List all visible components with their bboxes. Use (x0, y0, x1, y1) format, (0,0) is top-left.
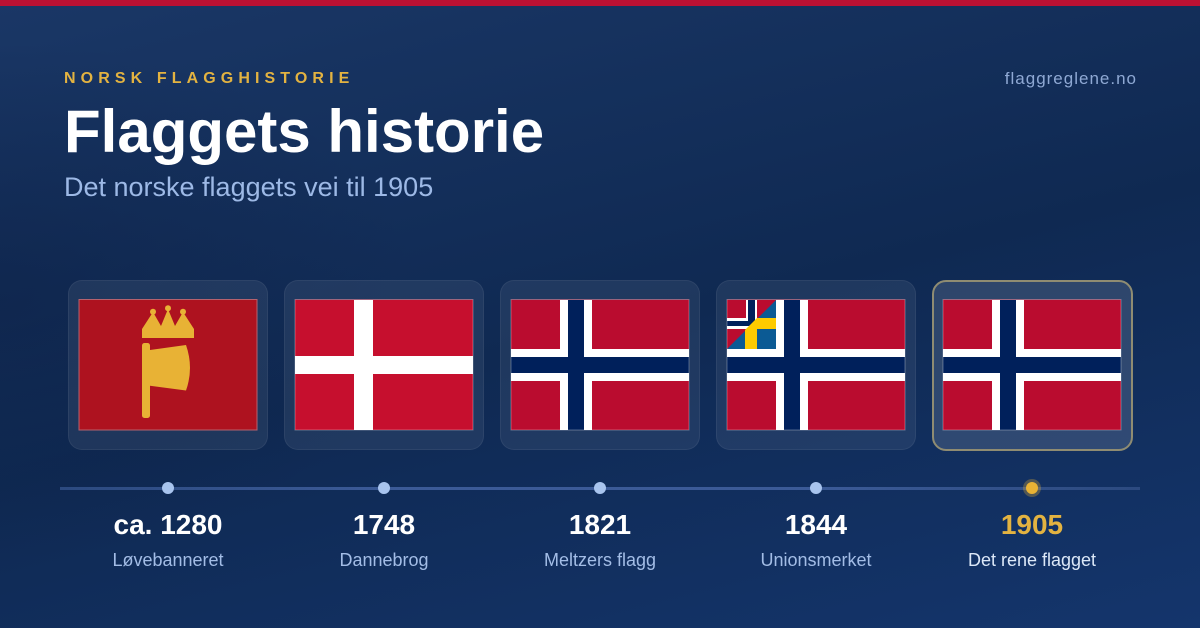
flag: Dannebrog (294, 299, 474, 430)
flag: Det rene flagget (942, 299, 1122, 430)
icon: lion axe (142, 343, 190, 418)
timeline dot: 1905 (highlighted) (1026, 482, 1038, 494)
flag: Meltzers flagg (510, 299, 690, 430)
timeline dot: 1821 (594, 482, 606, 494)
year: 1821: 1821 (569, 509, 631, 540)
title: Flaggets historie (64, 98, 544, 165)
timeline dot: ca. 1280 (162, 482, 174, 494)
label: Løvebanneret: Løvebanneret (112, 550, 224, 570)
panel: Meltzers flagg card (500, 280, 700, 450)
panel: Unionsmerket flag card (716, 280, 916, 450)
icon: union mark (727, 300, 776, 349)
panel: Løvebanneret flag card (68, 280, 268, 450)
label: Unionsmerket: Unionsmerket (760, 550, 872, 570)
year: ca. 1280: ca. 1280 (114, 509, 222, 540)
flag: Løvebanneret (78, 299, 258, 430)
year: 1844: 1844 (785, 509, 847, 540)
label: Dannebrog: Dannebrog (339, 550, 429, 570)
label: Meltzers flagg: Meltzers flagg (544, 550, 656, 570)
timeline line (60, 487, 1140, 490)
eyebrow label: NORSK FLAGGHISTORIE (64, 70, 354, 87)
label: Det rene flagget: Det rene flagget (968, 550, 1096, 570)
panel: Det rene flagget card (highlighted) (932, 280, 1133, 451)
top accent bar (0, 0, 1200, 6)
panel: Dannebrog flag card (284, 280, 484, 450)
timeline dot: 1748 (378, 482, 390, 494)
year: 1905: 1905 (1001, 509, 1063, 540)
year: 1748: 1748 (353, 509, 415, 540)
subtitle: Det norske flaggets vei til 1905 (64, 172, 433, 202)
website label: flaggreglene.no (1005, 69, 1137, 88)
timeline dot: 1844 (810, 482, 822, 494)
flag: Unionsmerket (726, 299, 906, 430)
icon: crown (142, 305, 194, 338)
